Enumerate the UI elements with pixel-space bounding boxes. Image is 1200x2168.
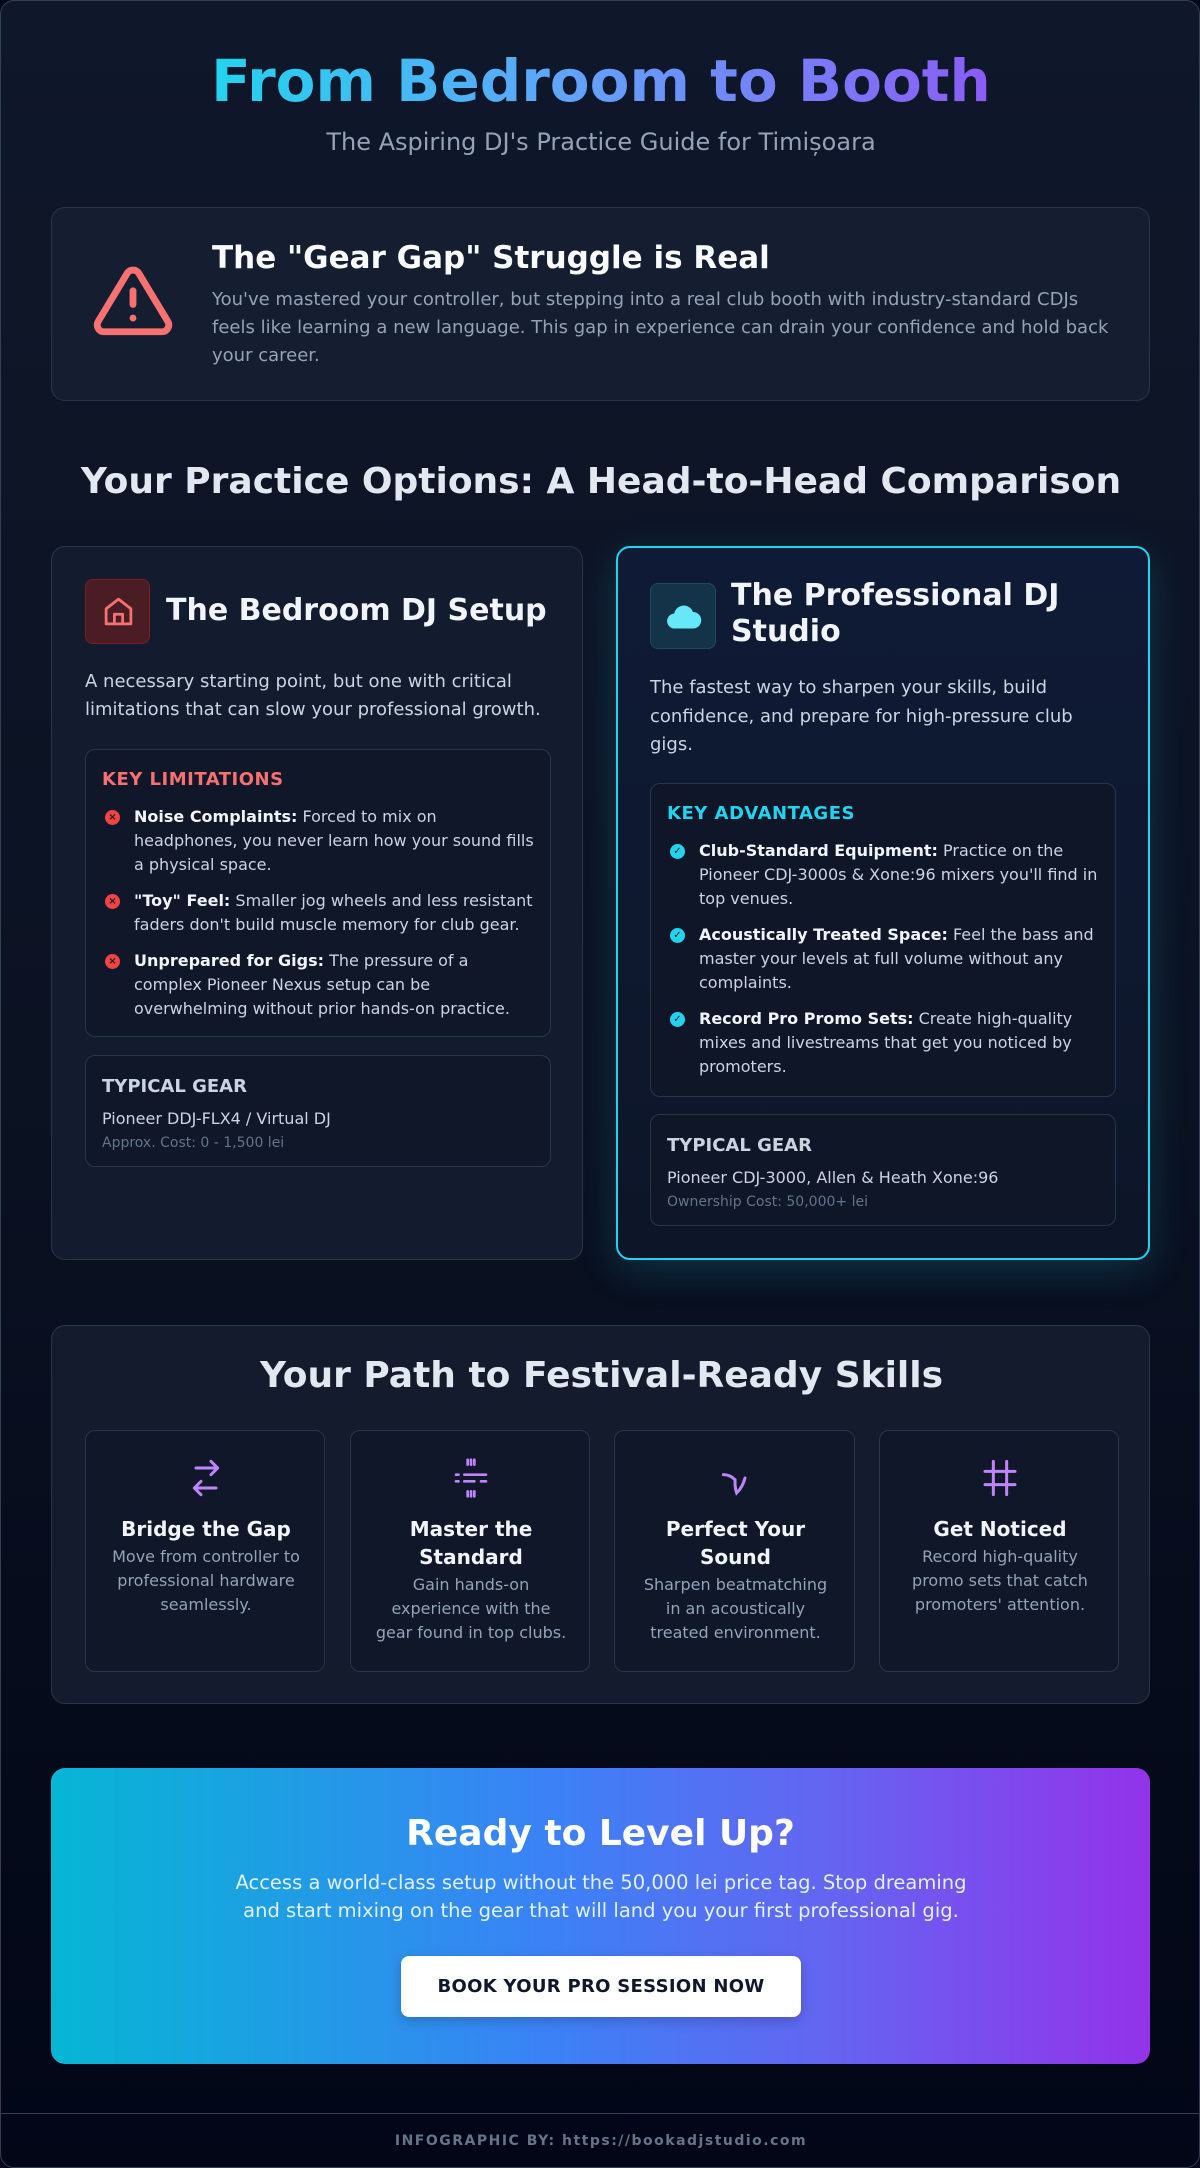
heading: gear gap: The "Gear Gap" Struggle is Real xyxy=(212,240,770,276)
icon: sound xyxy=(722,1473,746,1496)
subtitle: The Aspiring DJ's Practice Guide for Timișoara xyxy=(326,128,876,156)
card: bridge the gap: professional hardware xyxy=(117,1571,295,1590)
panel: pro gear: TYPICAL GEAR xyxy=(667,1135,812,1156)
text: cta: Access a world-class setup without the 50,000 lei price tag. Stop dreaming and start mixing on the gear that will land you your first professional gig. xyxy=(235,1871,967,1922)
list: advantages: master your levels at full volume without any xyxy=(699,949,1063,968)
list: limitations: overwhelming without prior hands-on practice. xyxy=(134,999,510,1018)
card: get noticed: Get Noticed xyxy=(933,1517,1067,1541)
list: advantages: ✓ xyxy=(673,846,682,857)
list: limitations: "Toy" Feel: Smaller jog wheels and less resistant xyxy=(134,891,533,910)
footer xyxy=(1,2113,1200,2168)
panel: path to skills xyxy=(51,1325,1150,1704)
list: limitations: a physical space. xyxy=(134,855,272,874)
card: perfect your sound xyxy=(614,1430,855,1672)
list: advantages: ✓ xyxy=(673,1014,682,1025)
icon: sliders xyxy=(454,1458,488,1498)
list: advantages: Club-Standard Equipment: Practice on the xyxy=(699,841,1063,860)
card: get noticed: Record high-quality xyxy=(922,1547,1078,1566)
heading: bedroom: The Bedroom DJ Setup xyxy=(166,593,547,628)
list: limitations: × xyxy=(108,812,117,823)
list: advantages: complaints. xyxy=(699,973,792,992)
card: perfect your sound: Perfect Your xyxy=(666,1517,805,1541)
icon: hash xyxy=(984,1460,1016,1496)
list: advantages: top venues. xyxy=(699,889,793,908)
button: book session xyxy=(401,1956,801,2017)
card: bridge the gap: Move from controller to xyxy=(112,1547,300,1566)
panel: gear gap xyxy=(51,207,1150,401)
list: advantages: Record Pro Promo Sets: Create high-quality xyxy=(699,1009,1072,1028)
list: limitations: × xyxy=(108,956,117,967)
list: advantages: mixes and livestreams that get you noticed by xyxy=(699,1033,1072,1052)
card: master the standard xyxy=(350,1430,590,1672)
heading: cta: Ready to Level Up? xyxy=(406,1813,795,1854)
icon: house xyxy=(85,579,150,644)
card: get noticed: promo sets that catch xyxy=(912,1571,1088,1590)
list: limitations: Unprepared for Gigs: The pressure of a xyxy=(134,951,468,970)
panel: bedroom gear: Pioneer DDJ-FLX4 / Virtual DJ xyxy=(102,1109,331,1128)
card: master the standard: gear found in top clubs. xyxy=(376,1623,566,1642)
list: advantages: Pioneer CDJ-3000s & Xone:96 mixers you'll find in xyxy=(699,865,1097,884)
list: advantages xyxy=(670,841,1097,1076)
list: limitations: faders don't build muscle memory for club gear. xyxy=(134,915,520,934)
list: limitations: × xyxy=(108,896,117,907)
card: perfect your sound: Sound xyxy=(700,1545,771,1569)
text: pro desc: The fastest way to sharpen your skills, build confidence, and prepare for high-pressure club gigs. xyxy=(650,677,1073,755)
list: advantages: promoters. xyxy=(699,1057,787,1076)
footer: INFOGRAPHIC BY: https://bookadjstudio.com xyxy=(395,2133,807,2149)
card: get noticed xyxy=(879,1430,1119,1672)
panel: bedroom gear: Approx. Cost: 0 - 1,500 lei xyxy=(102,1135,284,1151)
button: book session: BOOK YOUR PRO SESSION NOW xyxy=(437,1976,765,1997)
title: From Bedroom to Booth xyxy=(211,47,991,115)
text: gear gap body: You've mastered your controller, but stepping into a real club booth with industry-standard CDJs feels like learning a new language. This gap in experience can drain your confidence and hold back your career. xyxy=(212,289,1108,366)
card: master the standard: Master the xyxy=(410,1517,532,1541)
panel: key limitations xyxy=(85,749,551,1037)
card: perfect your sound: in an acoustically xyxy=(666,1599,805,1618)
list: limitations: Noise Complaints: Forced to mix on xyxy=(134,807,437,826)
heading: path: Your Path to Festival-Ready Skills xyxy=(260,1355,943,1396)
heading: advantages: KEY ADVANTAGES xyxy=(667,803,855,824)
card: master the standard: Gain hands-on xyxy=(413,1575,529,1594)
list: advantages: Acoustically Treated Space: Feel the bass and xyxy=(699,925,1094,944)
card: bridge the gap: Bridge the Gap xyxy=(121,1517,291,1541)
card: master the standard: experience with the xyxy=(391,1599,551,1618)
icon: cloud xyxy=(650,583,716,649)
card: master the standard: Standard xyxy=(419,1545,523,1569)
text: bedroom desc: A necessary starting point, but one with critical limitations that can slow your professional growth. xyxy=(85,671,541,720)
panel: pro gear xyxy=(650,1114,1116,1226)
panel: call to action xyxy=(51,1768,1150,2064)
panel: bedroom setup xyxy=(51,546,583,1260)
list: advantages: ✓ xyxy=(673,930,682,941)
card: bridge the gap xyxy=(85,1430,325,1672)
list: limitations xyxy=(105,807,534,1018)
heading: limitations: KEY LIMITATIONS xyxy=(102,769,284,790)
panel: key advantages xyxy=(650,783,1116,1097)
heading: comparison: Your Practice Options: A Head-to-Head Comparison xyxy=(81,461,1121,502)
card: perfect your sound: treated environment. xyxy=(650,1623,821,1642)
panel: pro gear: Ownership Cost: 50,000+ lei xyxy=(667,1194,868,1210)
icon: warning xyxy=(94,266,172,336)
list: limitations: headphones, you never learn how your sound fills xyxy=(134,831,534,850)
panel: pro studio xyxy=(616,546,1150,1260)
list: limitations: complex Pioneer Nexus setup can be xyxy=(134,975,430,994)
card: get noticed: promoters' attention. xyxy=(915,1595,1085,1614)
panel: bedroom gear xyxy=(85,1055,551,1167)
icon: arrows xyxy=(192,1460,220,1496)
panel: pro gear: Pioneer CDJ-3000, Allen & Heath Xone:96 xyxy=(667,1168,998,1187)
heading: pro: The Professional DJ Studio xyxy=(731,578,1059,649)
card: bridge the gap: seamlessly. xyxy=(160,1595,252,1614)
card: perfect your sound: Sharpen beatmatching xyxy=(644,1575,827,1594)
panel: bedroom gear: TYPICAL GEAR xyxy=(102,1076,247,1097)
